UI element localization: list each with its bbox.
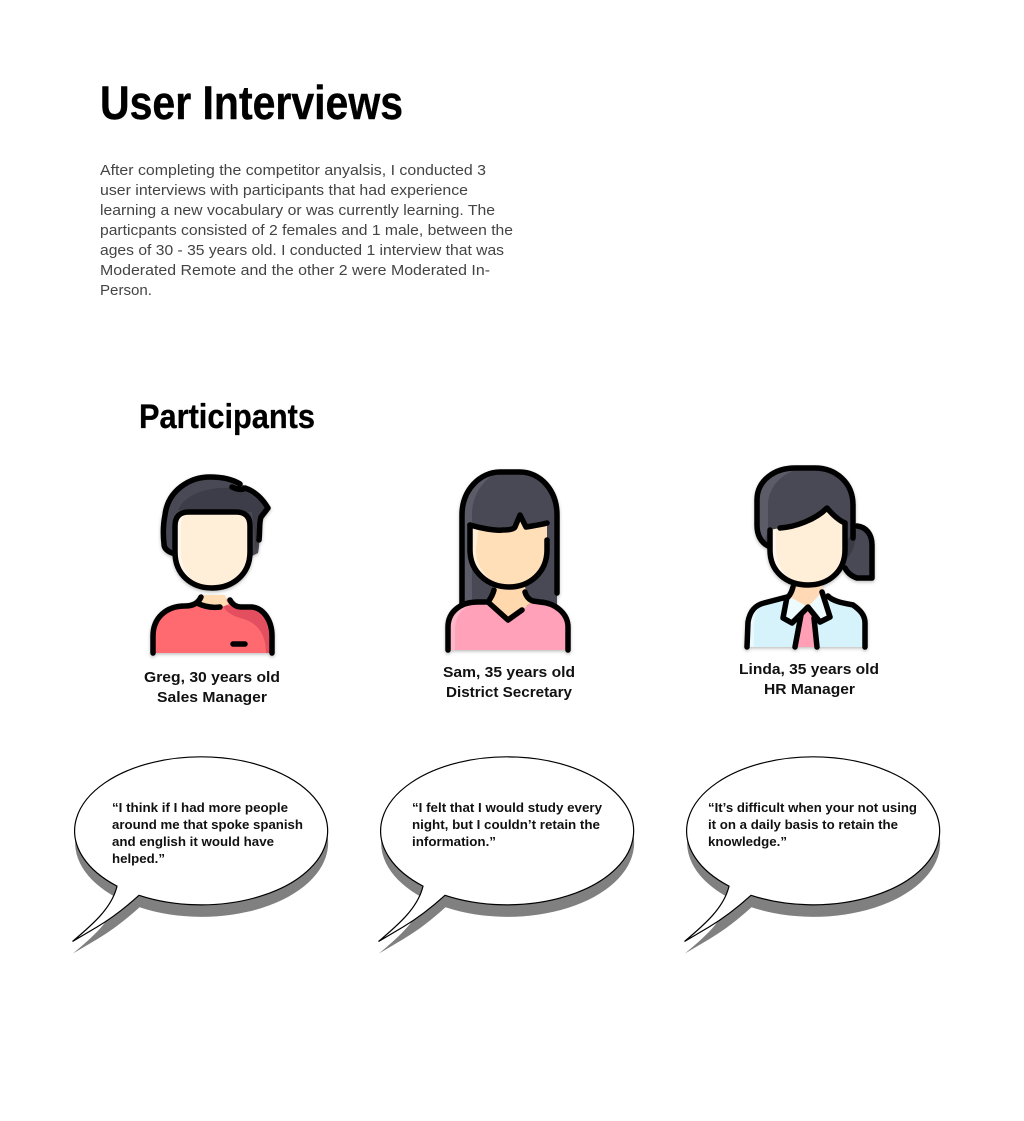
caption: Linda: Linda, 35 years old bbox=[739, 661, 879, 678]
speech bubble: Greg quote bbox=[72, 757, 328, 954]
speech bubble: Greg quote: around me that spoke spanish bbox=[112, 817, 303, 832]
speech bubble: Greg quote: “I think if I had more people bbox=[112, 800, 288, 815]
caption: Linda: HR Manager bbox=[764, 681, 855, 698]
speech bubble: Sam quote: “I felt that I would study every bbox=[412, 800, 603, 815]
speech bubble: Sam quote bbox=[378, 757, 634, 954]
icon: Linda avatar bbox=[747, 468, 872, 647]
intro text block: user interviews with participants that had experience bbox=[100, 182, 468, 199]
intro text block: ages of 30 - 35 years old. I conducted 1 interview that was bbox=[100, 242, 504, 259]
intro text block: Moderated Remote and the other 2 were Moderated In- bbox=[100, 262, 490, 279]
icon: Greg avatar bbox=[153, 477, 272, 653]
intro text block: particpants consisted of 2 females and 1 male, between the bbox=[100, 222, 513, 239]
intro text block: learning a new vocabulary or was currently learning. The bbox=[100, 202, 495, 219]
caption: Sam: District Secretary bbox=[446, 684, 573, 701]
speech bubble: Linda quote bbox=[684, 757, 940, 954]
caption: Linda bbox=[739, 661, 879, 698]
title: User Interviews bbox=[100, 76, 403, 129]
caption: Sam: Sam, 35 years old bbox=[443, 664, 575, 681]
heading: participants: Participants bbox=[139, 398, 315, 436]
speech bubble: Linda quote: “It’s difficult when your not using bbox=[708, 800, 917, 815]
caption: Greg: Sales Manager bbox=[157, 689, 267, 706]
speech bubble: Linda quote: knowledge.” bbox=[708, 834, 787, 849]
speech bubble: Sam quote: night, but I couldn’t retain the bbox=[412, 817, 600, 832]
speech bubble: Sam quote: information.” bbox=[412, 834, 496, 849]
intro text block bbox=[100, 162, 513, 299]
speech bubble: Linda quote: it on a daily basis to retain the bbox=[708, 817, 898, 832]
caption: Greg bbox=[144, 669, 280, 706]
caption: Greg: Greg, 30 years old bbox=[144, 669, 280, 686]
icon: Sam avatar bbox=[448, 472, 568, 650]
speech bubble: Greg quote: and english it would have bbox=[112, 834, 274, 849]
intro text block: After completing the competitor anyalsis, I conducted 3 bbox=[100, 162, 486, 179]
speech bubble: Greg quote: helped.” bbox=[112, 851, 165, 866]
intro text block: Person. bbox=[100, 282, 152, 299]
caption: Sam bbox=[443, 664, 575, 701]
